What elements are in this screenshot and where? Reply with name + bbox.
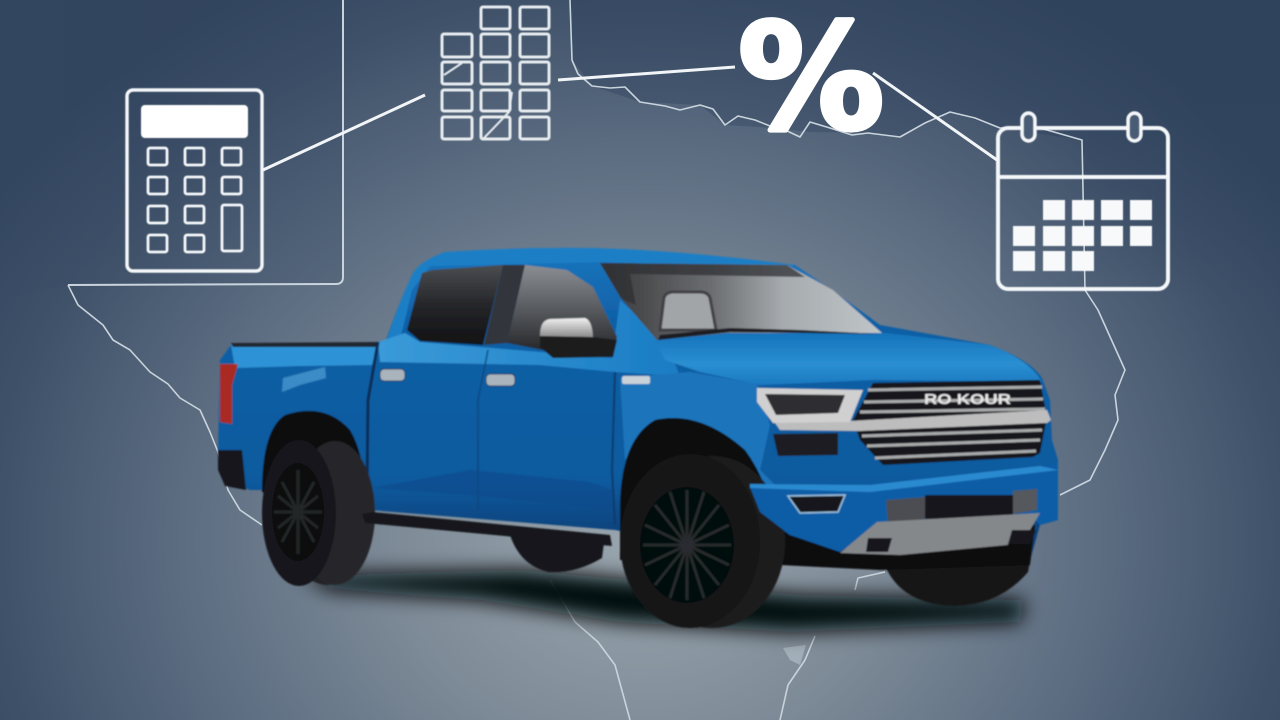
wiper bbox=[658, 328, 880, 340]
tow box right bbox=[1013, 489, 1037, 514]
main body silhouette bbox=[218, 248, 1058, 560]
front side window bbox=[507, 265, 617, 357]
lower bumper shadow bbox=[752, 510, 1035, 570]
windshield bbox=[600, 263, 882, 340]
lake bbox=[783, 645, 806, 665]
calendar frame bbox=[998, 128, 1168, 289]
icon: calendar bbox=[998, 113, 1168, 289]
front wheel arch bbox=[620, 418, 780, 560]
calculator keys bbox=[148, 148, 242, 252]
connector: percent to calendar bbox=[873, 73, 997, 160]
far front wheel bbox=[885, 550, 1032, 606]
door seam front bbox=[612, 372, 615, 525]
rear tire tread bbox=[281, 441, 375, 585]
door seam rear bbox=[367, 342, 378, 510]
mirror chrome cap bbox=[540, 318, 593, 337]
front fender bbox=[620, 372, 775, 500]
fender badge bbox=[622, 376, 650, 384]
panhandle border bbox=[68, 0, 343, 285]
B pillar bbox=[484, 265, 525, 345]
dark area above northern border bbox=[570, 0, 1280, 300]
dark band at top of windshield bbox=[600, 263, 805, 305]
northern border bbox=[570, 0, 1125, 495]
door handle front bbox=[486, 374, 515, 386]
headlight chrome frame bbox=[757, 388, 863, 423]
lower lamp bbox=[773, 433, 838, 456]
bed panel sheen bbox=[282, 367, 326, 392]
seat in windshield bbox=[660, 292, 716, 330]
ground shadow bbox=[300, 570, 1025, 632]
rear wheel arch bbox=[262, 411, 365, 500]
door handle rear bbox=[380, 369, 405, 381]
headlight bbox=[757, 388, 863, 423]
tail light bbox=[220, 364, 238, 424]
darker panel left of panhandle bbox=[0, 0, 343, 300]
icon: spreadsheet grid bbox=[442, 7, 549, 139]
door seam centre bbox=[478, 350, 488, 510]
southern tip bbox=[550, 580, 630, 720]
tow box left bbox=[886, 497, 925, 524]
rear rim spokes bbox=[274, 470, 322, 554]
calendar header divider bbox=[998, 175, 1168, 179]
front bumper bbox=[750, 462, 1058, 552]
western border bbox=[68, 285, 262, 525]
skid plate bbox=[840, 513, 1040, 555]
mirror housing bbox=[540, 334, 617, 358]
front rim hub bbox=[680, 538, 694, 552]
rear tire tread front bbox=[295, 441, 375, 585]
front tire tread bbox=[639, 456, 785, 628]
rio grande east bbox=[780, 572, 885, 720]
fog lamp bbox=[788, 495, 845, 513]
icon: calculator bbox=[127, 90, 262, 271]
bumper highlight bbox=[750, 466, 1058, 492]
rear window bbox=[407, 265, 503, 345]
calendar day squares bbox=[1013, 200, 1152, 271]
calculator display bbox=[141, 105, 248, 138]
grille badge lettering: RO KOUR bbox=[924, 391, 1011, 408]
cab pillars and roof bbox=[386, 248, 795, 342]
connector: calculator to grid bbox=[263, 95, 425, 170]
grille main chrome band bbox=[773, 410, 1051, 431]
exhaust cutouts bbox=[866, 530, 1036, 552]
rear bumper bbox=[218, 450, 246, 490]
mirror bbox=[540, 318, 617, 358]
headlight lens bbox=[765, 394, 845, 415]
front rim bbox=[640, 487, 734, 603]
hood bbox=[655, 332, 1042, 385]
bumper black inset bbox=[925, 495, 1013, 519]
rear tire bbox=[262, 440, 336, 586]
calendar rings bbox=[1022, 113, 1141, 141]
far rear wheel bbox=[510, 535, 605, 572]
front tire bbox=[620, 454, 760, 628]
grille dark backing bbox=[853, 380, 1047, 465]
pickup truck bbox=[218, 248, 1058, 628]
connector: grid to percent bbox=[558, 67, 735, 80]
front rim spokes bbox=[643, 490, 731, 600]
running board bbox=[362, 512, 612, 546]
cab shoulder line bbox=[378, 300, 680, 376]
grille bbox=[773, 380, 1051, 465]
rear rim bbox=[272, 463, 324, 561]
grille chrome bars bbox=[860, 387, 1045, 458]
lower door crease bbox=[372, 470, 612, 510]
calculator body bbox=[127, 90, 262, 271]
bed cover bbox=[231, 342, 378, 347]
bed rail highlight bbox=[231, 345, 378, 368]
